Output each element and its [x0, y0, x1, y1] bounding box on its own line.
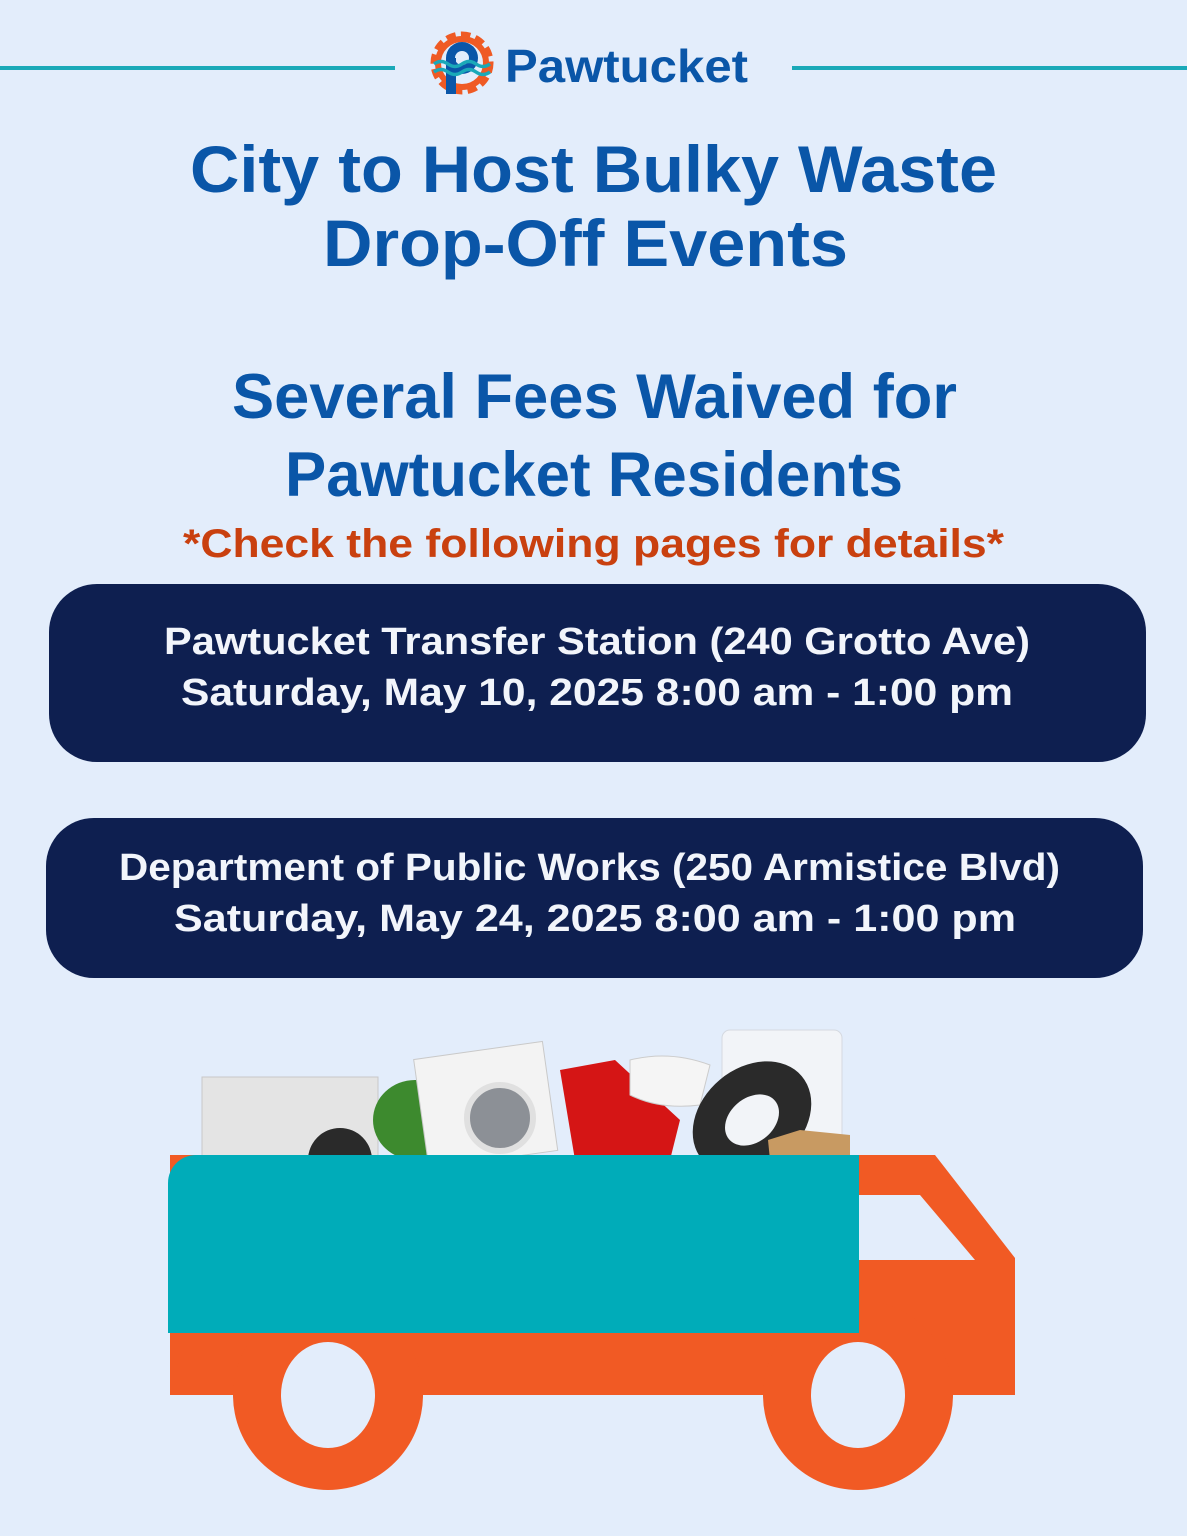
title: City to Host Bulky Waste — [190, 132, 997, 206]
note: *Check the following pages for details* — [183, 522, 1004, 566]
junk items — [202, 1030, 850, 1198]
icon: gear — [434, 36, 490, 94]
subtitle: Several Fees Waived for — [232, 362, 957, 432]
panel: event 2 — [46, 818, 1143, 978]
title — [190, 132, 997, 280]
logo wordmark: Pawtucket — [505, 40, 748, 92]
panel: event 1: Pawtucket Transfer Station (240 Grotto Ave) — [164, 621, 1030, 663]
illustration: truck with bulky waste — [168, 1030, 1015, 1490]
panel: event 1: Saturday, May 10, 2025 8:00 am - 1:00 pm — [181, 672, 1013, 714]
title: Drop-Off Events — [323, 206, 848, 280]
panel: event 1 — [49, 584, 1146, 762]
panel: event 2: Saturday, May 24, 2025 8:00 am - 1:00 pm — [174, 898, 1016, 940]
subtitle: Pawtucket Residents — [285, 440, 903, 510]
logo — [434, 36, 748, 94]
truck body — [170, 1155, 1015, 1395]
subtitle — [232, 362, 957, 510]
panel: event 2: Department of Public Works (250 Armistice Blvd) — [119, 847, 1060, 889]
